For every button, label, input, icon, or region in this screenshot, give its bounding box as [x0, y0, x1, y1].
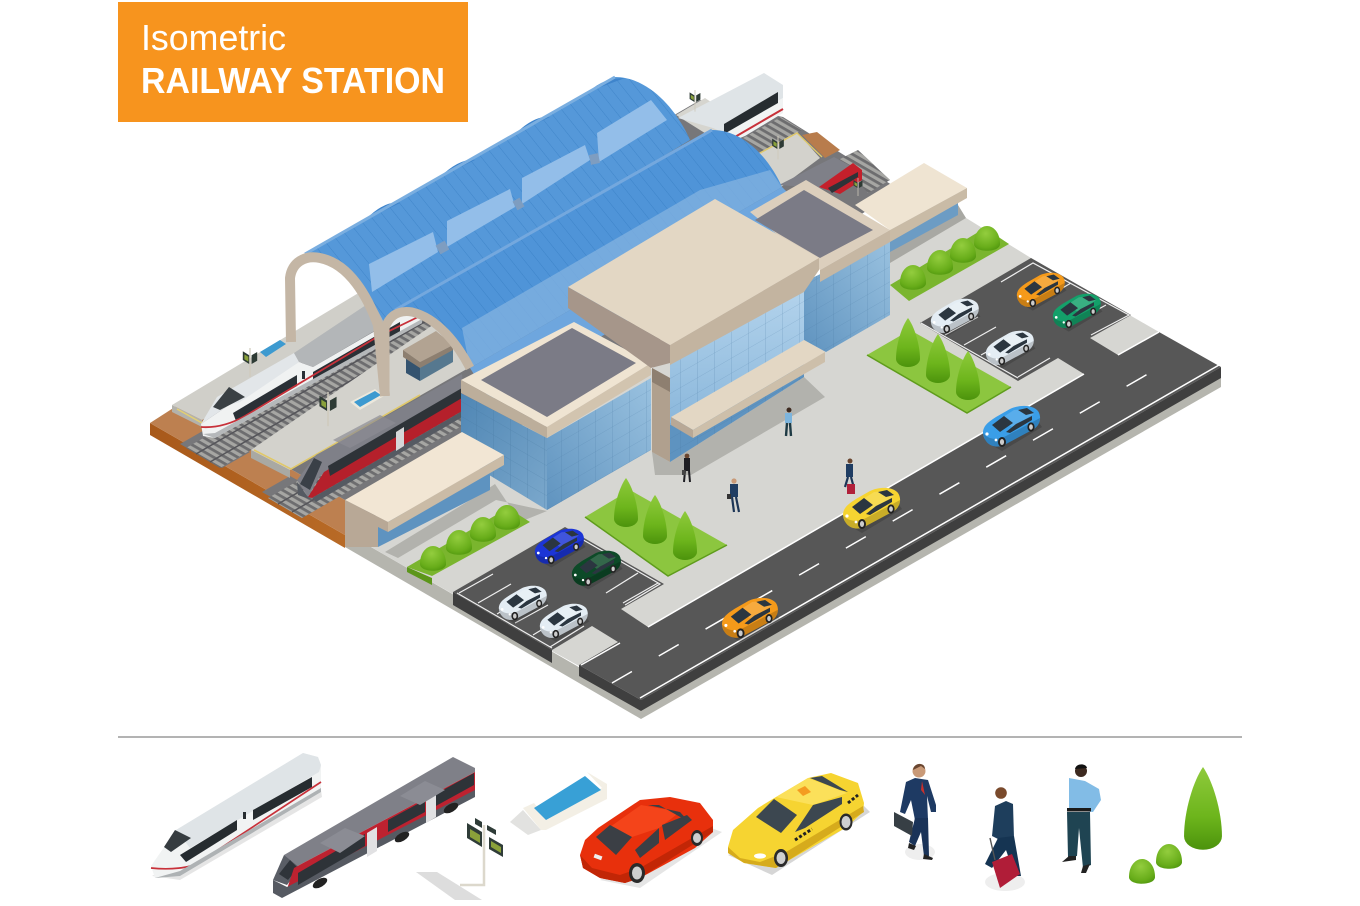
bench — [510, 772, 607, 835]
central glass — [670, 290, 804, 462]
roof vault 2 — [395, 130, 810, 400]
left wing glass — [461, 378, 651, 510]
lower annex glass — [378, 466, 490, 547]
title banner: RAILWAY STATION — [141, 60, 445, 101]
soil side — [150, 423, 345, 548]
upper annex glass — [890, 203, 958, 252]
track 1 — [186, 117, 802, 468]
back platform sign — [772, 136, 784, 159]
back sign — [690, 90, 700, 112]
track 2 — [268, 150, 890, 518]
taxi — [728, 773, 870, 875]
gravel patch at track 1 — [180, 428, 250, 468]
upper lawn with trees — [867, 318, 1011, 413]
platform sign middle — [319, 392, 337, 426]
right wing roof — [750, 180, 890, 282]
title banner: Isometric — [141, 17, 286, 58]
parking marks — [457, 263, 1129, 648]
car orange road — [722, 598, 780, 642]
asphalt side lot — [453, 592, 552, 663]
platform 1 — [172, 98, 745, 427]
asphalt side road — [579, 367, 1221, 711]
upper annex canopy — [855, 163, 967, 242]
upper annex shadow — [890, 205, 966, 263]
bench far — [260, 340, 286, 357]
big tree — [1184, 767, 1222, 850]
sign by back train — [854, 178, 862, 196]
red car — [580, 797, 722, 888]
gravel bed — [178, 100, 900, 517]
lower annex canopy — [345, 432, 504, 547]
bench on platform — [350, 389, 384, 410]
shelter — [403, 331, 453, 381]
car blue road — [983, 406, 1042, 451]
road markings — [581, 332, 1219, 698]
station sign post — [416, 818, 503, 900]
high-speed train on platform — [201, 296, 422, 438]
arch 1 — [290, 257, 385, 396]
left wing roof — [461, 322, 651, 438]
soil patch back — [802, 132, 840, 158]
icon row — [151, 753, 1222, 900]
police officer — [1062, 764, 1101, 873]
ground shadow central — [652, 377, 825, 475]
lower lawn with trees — [585, 478, 727, 576]
back white train — [678, 73, 783, 142]
roof vault 1 — [305, 77, 690, 325]
car white 1 — [931, 299, 980, 337]
car green — [1053, 294, 1102, 332]
lower hedge — [407, 505, 530, 585]
central pillar — [652, 368, 670, 462]
passenger with red suitcase — [985, 787, 1025, 891]
station scene — [150, 73, 1221, 719]
car blue lot — [535, 529, 586, 568]
red train in station — [297, 374, 464, 502]
regional red train — [273, 757, 475, 898]
upper hedge — [890, 226, 1009, 301]
base side — [345, 368, 1221, 719]
platform sign left — [243, 348, 257, 377]
central roof — [568, 199, 819, 368]
man with briefcase near pillar — [682, 454, 690, 482]
title banner — [118, 2, 468, 122]
plaza — [345, 213, 1159, 666]
platform 2 — [251, 132, 822, 478]
businessman — [894, 764, 936, 860]
police officer — [785, 408, 792, 436]
canopy central — [671, 340, 825, 438]
high-speed train — [151, 753, 322, 880]
lower central glass — [670, 350, 804, 462]
divider — [118, 736, 1242, 738]
car white 3 — [499, 586, 548, 624]
passenger with suitcase — [845, 458, 855, 494]
asphalt — [453, 258, 1221, 700]
soil top strip — [150, 405, 375, 535]
taxi road — [843, 488, 902, 533]
car orange upper — [1017, 273, 1066, 311]
bush large — [1156, 844, 1182, 869]
back red train — [779, 157, 862, 194]
gravel patch at track 2 — [262, 476, 330, 515]
right wing glass — [804, 240, 890, 352]
car white 2 — [986, 331, 1035, 369]
arch 2 — [385, 312, 470, 396]
bush small — [1129, 859, 1155, 884]
car dark green — [572, 551, 623, 590]
shadow near left wing — [385, 484, 547, 558]
car white 4 — [540, 604, 589, 642]
man walking — [727, 478, 739, 512]
